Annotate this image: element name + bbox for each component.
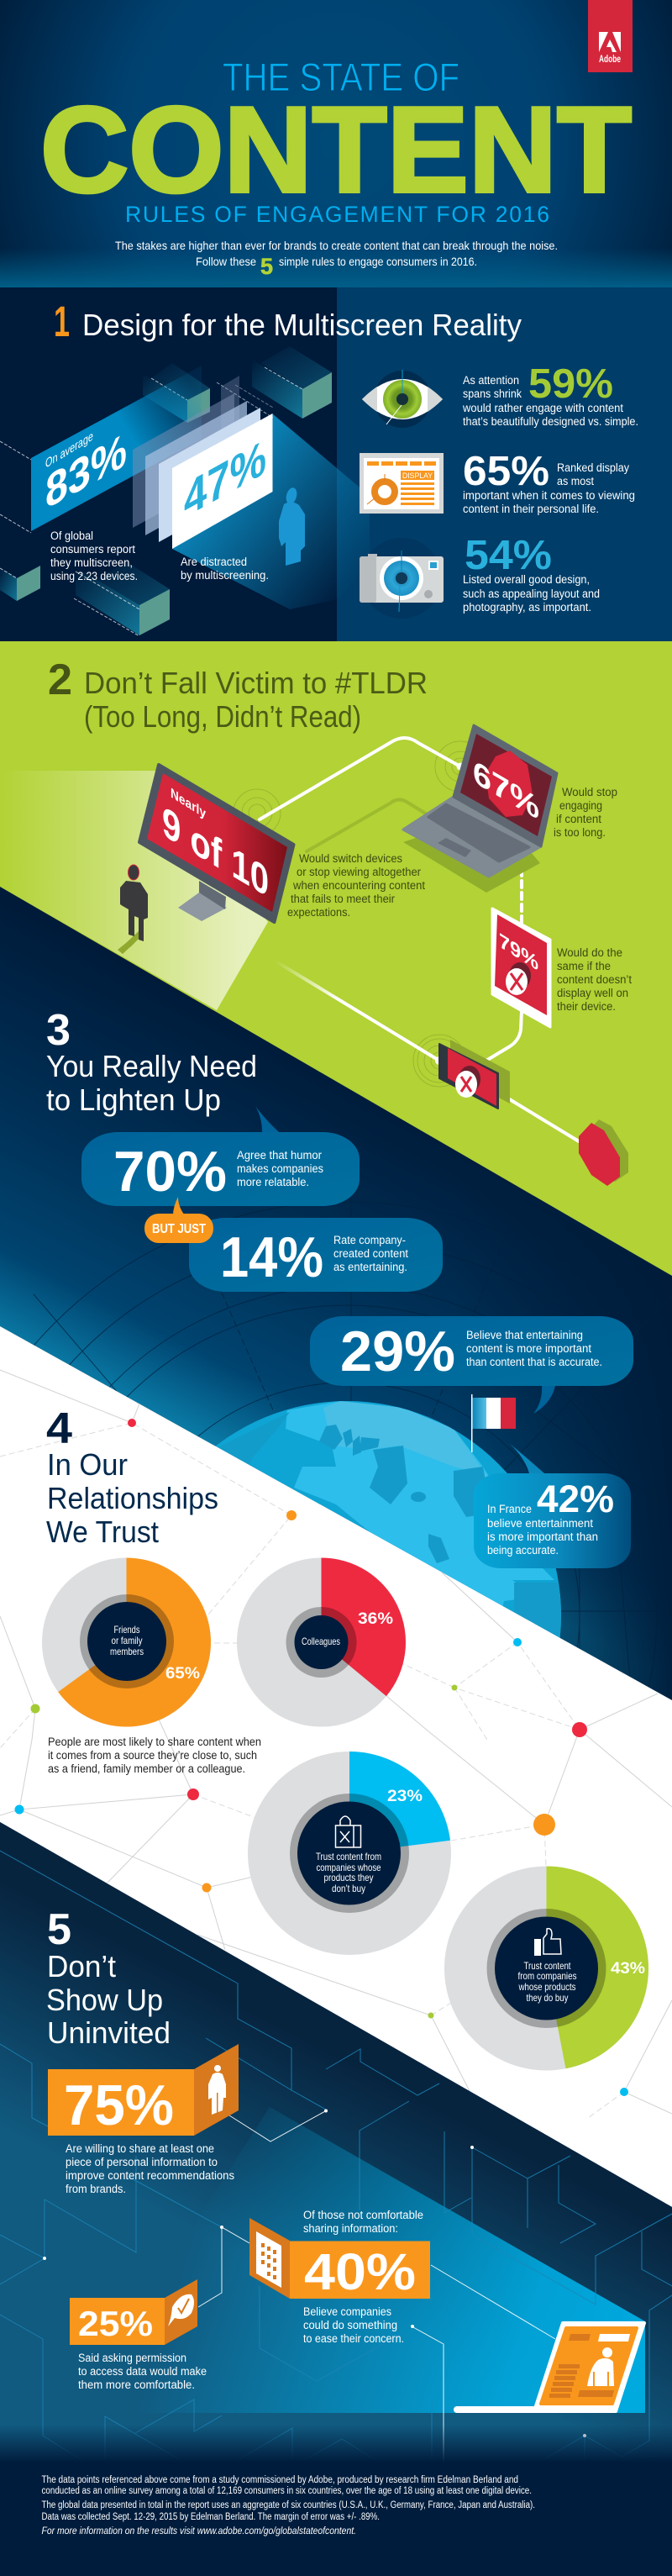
intro text: simple rules to engage consumers in 2016. [279,255,477,268]
text: 40 percent captions [303,2209,423,2345]
text: 79 percent caption: Would do the [557,946,622,959]
icon: data cubes [0,346,332,636]
text: 67 percent caption: Would stop [562,786,617,798]
speech bubble: 29 percent: Believe that entertaining [466,1329,583,1341]
heading: section 2 [48,656,428,734]
icon: laptop with profile [454,2323,644,2413]
text: 25 percent caption [78,2352,207,2391]
footer: conducted as an online survey among a total of 12,169 consumers in six countries, over the age of 18 using at least one digital device. [42,2486,532,2496]
donut: colleagues 36 percent: 36% [358,1610,393,1628]
icon: person [208,2065,226,2115]
callout: but just: BUT JUST [152,1222,206,1236]
icon: thumbs up [534,1929,561,1956]
heading: section 4 [46,1404,218,1549]
heading: section 2: Don’t Fall Victim to #TLDR [84,666,428,700]
text: 9 of 10 caption: or stop viewing altogether [297,866,421,878]
text: 79 percent caption: same if the [557,960,611,972]
donut: companies they do buy 43 percent: they do buy [526,1992,568,2004]
icon: speech bubble with check [168,2294,194,2326]
panel: 83 percent screen: 83% [45,422,127,519]
text: 54 percent: such as appealing layout and [463,587,600,600]
footer: Data was collected Sept. 12-29, 2015 by Edelman Berland. The margin of error was +/- .89%. [42,2512,380,2522]
heading: section 5 [46,1905,171,2050]
text: 79 percent caption: content doesn’t [557,973,632,986]
text: 9 of 10 caption: Would switch devices [299,852,402,865]
panel: 83 percent screen [31,366,202,531]
donut: colleagues 36 percent [237,1558,406,1726]
icon: laptop [403,725,557,893]
speech bubble: 29 percent: content is more important [466,1342,591,1355]
icon: camera [360,538,444,619]
donut: friends or family 65 percent: members [110,1646,144,1657]
donut: companies they don't buy 23 percent: 23% [387,1788,423,1805]
text: 40 percent captions: Of those not comfortable [303,2209,423,2221]
speech bubble: 14 percent [189,1218,443,1292]
text: 59 percent: spans shrink [463,387,522,400]
text: 67 percent caption: engaging [559,799,602,812]
icon: monitor: Nearly [171,784,206,822]
intro text: The stakes are higher than ever for brands to create content that can break through the noise. [115,239,558,252]
donut: companies they do buy 43 percent [444,1866,648,2071]
donut: companies they don't buy 23 percent: companies whose [316,1862,381,1873]
donut: companies they do buy 43 percent: from companies [517,1970,576,1982]
text: 25 percent caption: Said asking permission [78,2352,186,2364]
text: 75 percent caption: Are willing to share at least one [66,2142,214,2155]
text: 40 percent captions: could do something [303,2319,397,2331]
text: 47 percent caption: by multiscreening. [181,569,269,582]
speech bubble: 29 percent: 29% [340,1320,455,1383]
text: 54 percent: Listed overall good design, [463,573,590,586]
footer: The global data presented in total in the report uses an aggregate of six countries (U.S.A., U.K., Germany, France, Japan and Australia). [42,2500,535,2510]
donut: companies they don't buy 23 percent: Trust content from [316,1851,381,1862]
heading: section 4: 4 [46,1404,72,1453]
text: 83 percent caption: Of global [50,529,93,542]
text: 25 percent caption: to access data would make [78,2365,207,2378]
speech bubble: 14 percent: Rate company- [333,1234,406,1246]
panel: section 1 multiscreen [0,287,672,641]
icon: tablet [492,909,550,1027]
icon: laptop: 67% [473,753,539,827]
text: 59 percent: 59% [528,361,613,407]
text: 79 percent caption: display well on [557,987,628,999]
heading: section 5: 5 [47,1905,71,1954]
speech bubble: 70 percent: 70% [113,1140,227,1204]
icon: phone [439,1040,510,1109]
panel: section 4 trust [0,1326,672,2207]
text: sharing paragraph: it comes from a source they’re close to, such [48,1749,257,1762]
title: THE STATE OF [223,55,459,99]
text: 47 percent caption: Are distracted [181,556,247,568]
stat box: 40 percent: 40% [304,2243,416,2300]
text: 65 percent: content in their personal life. [463,503,599,515]
Adobe logo tag: Adobe [599,53,621,65]
speech bubble: 70 percent: makes companies [237,1162,323,1175]
icon: monitor [139,765,294,922]
icon: building [256,2231,281,2288]
text: 65 percent [463,449,635,515]
callout: but just [144,1197,213,1243]
stat box: 25 percent [70,2279,197,2345]
text: 65 percent: important when it comes to viewing [463,489,635,502]
donut: companies they do buy 43 percent: whose products [518,1981,576,1993]
text: 65 percent: as most [557,475,594,487]
footer [0,2463,672,2576]
panel: section 3 humor [0,887,672,1700]
icon: tablet: 79% [499,928,538,976]
title: CONTENT [40,82,632,218]
text: 59 percent [462,361,638,428]
intro text: Follow these [196,255,256,268]
text: 47 percent caption [181,556,269,582]
text: sharing paragraph: People are most likely to share content when [48,1736,261,1748]
heading: section 1 [54,298,522,345]
text: 75 percent caption: piece of personal information to [66,2156,218,2168]
icon: display ad [360,453,444,514]
stat box: 40 percent [249,2218,430,2300]
text: 83 percent caption: using 2.23 devices. [50,570,138,582]
heading: section 3: You Really Need [46,1049,257,1083]
text: 9 of 10 caption: when encountering content [292,879,425,892]
text: 75 percent caption: improve content recommendations [66,2169,234,2182]
speech bubble: 70 percent: more relatable. [237,1176,309,1188]
text: 9 of 10 caption: expectations. [287,906,350,919]
panel: layered screens with 47 percent [133,376,272,549]
speech bubble: France 42 percent: believe entertainment [487,1517,593,1530]
speech bubble: 14 percent: 14% [220,1225,323,1289]
text: 25 percent caption: them more comfortable. [78,2378,195,2391]
text: 54 percent: 54% [465,533,552,578]
heading: section 3: 3 [46,1006,71,1055]
speech bubble: 29 percent [310,1316,633,1414]
text: 65 percent: Ranked display [557,461,629,474]
icon: French flag [471,1394,516,1452]
stat box: 75 percent [48,2044,239,2137]
heading: section 1: Design for the Multiscreen Reality [82,308,522,342]
title: RULES OF ENGAGEMENT FOR 2016 [125,202,549,227]
icon: person viewer [118,865,148,954]
speech bubble: 70 percent: Agree that humor [237,1149,322,1162]
donut: colleagues 36 percent: Colleagues [302,1636,340,1647]
text: 40 percent captions: Believe companies [303,2305,391,2318]
icon: monitor: 9 of 10 [162,798,269,907]
speech bubble: 14 percent: created content [333,1247,408,1260]
donut: friends or family 65 percent [42,1558,211,1726]
heading: section 2: (Too Long, Didn’t Read) [84,699,361,734]
text: 59 percent: would rather engage with content [462,402,623,414]
stat box: 75 percent: 75% [64,2073,174,2137]
connector lines [234,738,579,1141]
text: sharing paragraph [48,1736,261,1775]
icon: blue person [279,487,305,566]
speech bubble: 70 percent [81,1106,360,1206]
intro text: 5 [260,254,273,279]
text: 65 percent: 65% [463,449,549,494]
panel: 83 percent screen: On average [45,429,93,471]
light beam from laptop [73,2107,645,2413]
donut: friends or family 65 percent: 65% [165,1665,200,1683]
donut: companies they do buy 43 percent: 43% [611,1960,645,1978]
text: 75 percent caption [66,2142,234,2195]
network nodes [15,1419,628,2096]
white circuit traces [198,2111,555,2463]
text: 67 percent caption: is too long. [554,826,606,839]
panel: section 5 uninvited [0,1822,672,2463]
heading: section 1: 1 [54,298,70,345]
light glow around screens [172,414,370,609]
text: 40 percent captions: to ease their concern. [303,2332,404,2345]
world grid [34,1197,651,1688]
text: 59 percent: As attention [463,374,519,387]
text: sharing paragraph: as a friend, family member or a colleague. [48,1762,245,1775]
text: 75 percent caption: from brands. [66,2183,126,2195]
donut: companies they do buy 43 percent: Trust content [524,1960,571,1972]
icon: shopping bag with X [336,1816,361,1847]
circuit lines [0,1851,672,2463]
heading: section 3: to Lighten Up [46,1083,221,1117]
text: 79 percent caption [557,946,632,1013]
text: 54 percent: photography, as important. [463,601,591,614]
header background [0,0,672,287]
globe [215,1401,561,1637]
text: 59 percent: that’s beautifully designed vs. simple. [463,415,638,428]
icon: eye [362,370,443,428]
footer: The data points referenced above come from a study commissioned by Adobe, produced by research firm Edelman Berland and [42,2475,518,2485]
text: 9 of 10 caption [287,852,425,919]
heading: section 5: Don’t [47,1949,116,1983]
speech bubble: France 42 percent: In France [487,1503,532,1515]
fade into footer [0,2425,672,2463]
text: 67 percent caption: if content [556,813,601,825]
panel: layered screens with 47 percent: 47% [184,429,266,529]
donut: companies they don't buy 23 percent [248,1752,451,1955]
text: 83 percent caption: consumers report [50,543,135,556]
footer: For more information on the results visit www.adobe.com/go/globalstateofcontent. [42,2526,356,2536]
text: 83 percent caption: they multiscreen, [50,556,133,569]
text: 9 of 10 caption: that fails to meet their [291,893,395,905]
speech bubble: France 42 percent: being accurate. [487,1544,559,1557]
heading: section 4: Relationships [47,1481,218,1515]
panel: section 2 TLDR [0,641,672,1280]
heading: section 5: Show Up [46,1983,163,2017]
network lines [0,1370,672,2118]
text: 40 percent captions: sharing information: [303,2222,398,2235]
heading: section 5: Uninvited [47,2015,171,2050]
icon: display ad: DISPLAY [402,471,433,481]
heading: section 2: 2 [48,656,72,704]
donut: companies they don't buy 23 percent: don’t buy [332,1883,365,1894]
stat box: 25 percent: 25% [78,2304,153,2343]
heading: section 4: We Trust [46,1515,159,1549]
heading: section 3 [46,1006,257,1117]
speech bubble: France 42 percent [474,1444,631,1568]
donut: companies they don't buy 23 percent: products they [324,1872,373,1883]
text: 83 percent caption [50,529,138,582]
heading: section 4: In Our [47,1447,128,1482]
text: 54 percent [463,533,600,614]
speech bubble: France 42 percent: 42% [537,1478,614,1520]
speech bubble: France 42 percent: is more important than [487,1530,598,1543]
text: 67 percent caption [554,786,617,839]
donut: friends or family 65 percent: Friends [114,1624,139,1636]
speech bubble: 29 percent: than content that is accurate. [466,1356,602,1368]
text: 79 percent caption: their device. [557,1000,616,1013]
intro text [115,239,558,279]
speech bubble: 14 percent: as entertaining. [333,1261,407,1273]
Adobe logo tag [588,0,633,72]
donut: friends or family 65 percent: or family [111,1635,143,1646]
icon: stop sign [579,1119,628,1186]
